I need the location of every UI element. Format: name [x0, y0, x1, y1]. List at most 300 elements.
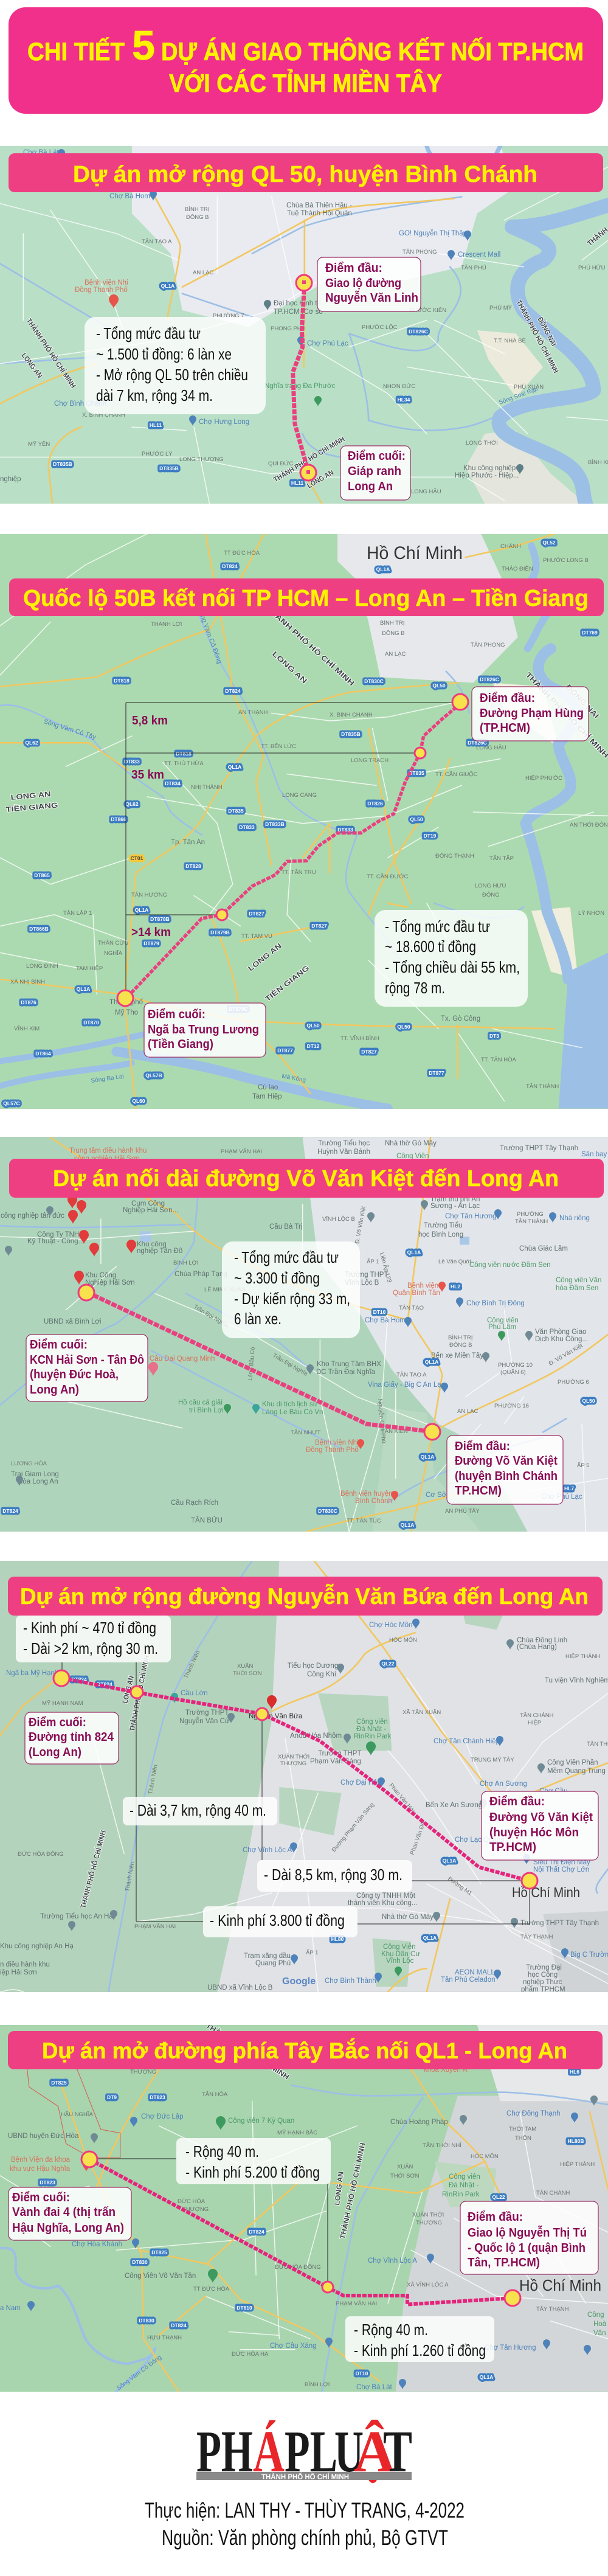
- info box: second section: - Dài 3,7 km, rộng 40 m.: [130, 1801, 266, 1819]
- callout: end: [144, 1003, 266, 1057]
- map labels: PHẠM VĂN HAI: [336, 2300, 377, 2307]
- map labels: nghiệp: [0, 476, 21, 483]
- info box: [222, 1241, 360, 1338]
- road shields: HL11: [150, 422, 162, 428]
- map labels: TÂY THẠNH: [520, 1934, 553, 1940]
- map labels: ĐÔNG B: [449, 1342, 472, 1349]
- road shields: QL1A: [161, 283, 174, 289]
- map labels: THANH LỢI: [151, 621, 182, 628]
- map labels: HẬU NGHĨA: [61, 2111, 93, 2118]
- road shields: QL57B: [145, 1072, 162, 1078]
- map labels: Chùa Bà Thiên Hậu -: [286, 202, 352, 209]
- road shields: DT879C: [229, 1006, 248, 1012]
- map labels: Đường M1: [446, 1875, 473, 1897]
- map labels: Trường Đại: [526, 1964, 562, 1971]
- map pins: [68, 1619, 568, 1983]
- road shields: QL62: [25, 740, 38, 746]
- map labels: ĐỨC HÒA ĐÔNG: [18, 1851, 64, 1858]
- map labels: AN THẠNH: [238, 709, 268, 716]
- map labels: Nhà thờ Gò Mây: [382, 1914, 434, 1921]
- map labels: TT. VĨNH BÌNH: [340, 1035, 379, 1042]
- map labels: Liên Ấp 123: [378, 1252, 393, 1283]
- route: QL 50B: [126, 704, 460, 998]
- map labels: HIỆP THÀNH: [560, 2161, 595, 2168]
- map labels: HIỆP: [528, 1720, 541, 1726]
- road shields: DT826: [367, 800, 383, 807]
- map labels: Tân Phú Celadon: [441, 1976, 496, 1984]
- road shields: DT824: [225, 688, 241, 694]
- route markers: [81, 2151, 520, 2306]
- map labels: Công viên: [449, 2173, 480, 2181]
- map labels: Trường THPT: [345, 1271, 388, 1279]
- map labels: Tiểu học Dương: [288, 1662, 338, 1670]
- callout: start: [472, 687, 589, 741]
- heading: Nguyễn Văn Bứa: [8, 1577, 603, 1616]
- map labels: phẩm TPHCM: [521, 1986, 565, 1993]
- map labels: PHÚ HỮU: [578, 265, 606, 271]
- logo: Pháp Luật: U: [334, 2419, 364, 2484]
- map labels: TT. THỦ THỪA: [164, 760, 204, 767]
- map labels: TÂN LẬP 1: [63, 910, 92, 917]
- road shields: QL22: [492, 2194, 505, 2200]
- heading: Northwest road: Dự án mở đường phía Tây Bắc nối QL1 - Long An: [42, 2038, 567, 2063]
- map labels: CHÁNH: [500, 543, 521, 550]
- map labels: MỸ YÊN: [28, 441, 50, 448]
- map labels: ẤP 1: [367, 1258, 379, 1265]
- road shields: QL1A: [228, 764, 241, 770]
- map labels: a Nam: [0, 2305, 21, 2312]
- map labels: Chợ Bà Lát: [356, 2384, 392, 2391]
- title banner: CHI TIẾT: [27, 37, 125, 66]
- map labels: BÌNH TRỊ: [448, 1335, 472, 1341]
- distance labels: 35 km: [131, 768, 164, 782]
- map labels: PHƯỜNG 10: [498, 1362, 533, 1369]
- map labels: THỚI SƠN: [390, 2173, 420, 2179]
- map labels: THỚI SƠN: [233, 1670, 262, 1677]
- map labels: Đồng Thành Phố: [306, 1446, 359, 1454]
- map labels: Vĩnh Lộc B: [345, 1279, 379, 1286]
- map labels: [5, 543, 608, 1100]
- map labels: TÂN KIÊN: [381, 1428, 408, 1435]
- callout: start: [482, 1791, 598, 1860]
- map labels: Phạm Văn Sáng: [310, 1758, 361, 1765]
- map labels: THÀNH PHỐ HỒ CHÍ MINH: [78, 1829, 108, 1909]
- heading: Võ Văn Kiệt: [9, 1159, 604, 1198]
- map labels: Thành Niên: [147, 1764, 159, 1795]
- map labels: Chợ Tân Chánh Hiệp: [434, 1738, 500, 1745]
- map labels: trí Bình Lợi: [189, 1407, 224, 1414]
- map labels: Đại học Kinh tế: [274, 300, 322, 307]
- map labels: Láng Le Bàu Cò Vn: [262, 1409, 323, 1416]
- map labels: Công Ty TNHH: [37, 1231, 85, 1238]
- map labels: TÂN PHONG: [471, 642, 505, 648]
- map labels: Sân bay: [581, 1151, 607, 1158]
- map labels: Nhà thờ Gò Mây: [385, 1140, 437, 1147]
- map labels: ĐÔNG B: [186, 214, 209, 221]
- info box: ~ 1.500 tỉ đồng: 6 làn xe: [96, 345, 232, 363]
- callout: start: Điểm đầu:: [489, 1795, 545, 1808]
- heading: QL 50B: [9, 578, 604, 616]
- map labels: LONG HẬU: [476, 745, 506, 751]
- map labels: Tp. Tân An: [171, 839, 205, 846]
- map labels: Đ. Võ Văn Kiệt: [548, 1342, 584, 1367]
- map labels: BÌNH LỢI: [173, 1260, 198, 1266]
- map labels: Chợ Hưng Long: [199, 418, 249, 426]
- map labels: LƯƠNG HÒA: [11, 1460, 47, 1467]
- map labels: THƯỢNG: [280, 1760, 306, 1767]
- distance labels: [131, 714, 171, 939]
- map labels: PHƯỜNG 16: [494, 1403, 529, 1409]
- info box: ~ 3.300 tỉ đồng: [234, 1269, 320, 1287]
- heading: QL 50B: Quốc lộ 50B kết nối TP HCM – Long An – Tiền Giang: [23, 586, 589, 611]
- map labels: QUI ĐỨC: [268, 460, 294, 467]
- map labels: Văn: [593, 2330, 606, 2337]
- map labels: Kho Trung Tâm BHX: [317, 1361, 381, 1368]
- callout: start: (huyện Bình Chánh: [455, 1470, 558, 1483]
- info box: cost: - Kinh phí 3.800 tỉ đồng: [210, 1911, 345, 1929]
- road shields: DT877: [277, 1047, 293, 1054]
- start point marker: [296, 275, 312, 291]
- map labels: Trường THPT: [185, 1709, 229, 1717]
- info box: lower: - Rộng 40 m.: [354, 2321, 428, 2339]
- road shields: DT9: [107, 2094, 117, 2100]
- map labels: XUÂN THỚI: [412, 2212, 444, 2218]
- map labels: XÃ TÂN XUÂN: [402, 1709, 441, 1716]
- map labels: Phan Văn Đối: [409, 1820, 427, 1856]
- callout: start: [460, 2201, 598, 2274]
- map labels: Bệnh viện Nhi: [85, 279, 128, 286]
- map labels: Công viên: [487, 1317, 519, 1324]
- map labels: TÂN HÒA: [202, 2091, 228, 2098]
- map labels: TIỀN GIANG: [263, 963, 311, 1003]
- map labels: THƯỢNG: [416, 2220, 442, 2226]
- map labels: ĐỨC HÒA ĐÔNG: [275, 2264, 321, 2271]
- road shields: DT826C: [409, 328, 428, 335]
- road shields: DT833B: [265, 821, 285, 827]
- map labels: Kỹ Thuật - Công...: [27, 1238, 84, 1245]
- map labels: Trần Đại Nghĩa: [271, 1352, 309, 1378]
- road shields: QL57C: [3, 1100, 20, 1106]
- info box: dài 7 km, rộng 34 m.: [96, 386, 213, 404]
- map labels: LÊ MINH XUÂN: [204, 1286, 246, 1293]
- map labels: LONG AN: [333, 2171, 345, 2206]
- map labels: Chợ Phú Lạc: [307, 340, 348, 347]
- callout: start: Đường Võ Văn Kiệt: [455, 1454, 558, 1468]
- map labels: THÂN CỬU: [98, 939, 128, 946]
- callout: end: Đường tỉnh 824: [29, 1731, 114, 1744]
- map labels: ẤP 1: [306, 1949, 318, 1956]
- map labels: Sương - An Lạc: [430, 1203, 480, 1210]
- map labels: Trường THPT Tây Thạnh: [500, 1145, 578, 1152]
- map labels: X. BÌNH CHÁNH: [330, 712, 373, 718]
- map labels: HIỆP THÀNH: [565, 1653, 600, 1660]
- map labels: ĐỒNG NAI: [536, 315, 559, 347]
- end point marker: [300, 465, 316, 481]
- map labels: Mỹ Tho: [115, 1009, 138, 1016]
- route markers: [54, 1670, 537, 1889]
- road shields: DT834: [165, 780, 181, 786]
- map labels: BÌNH TRỊ: [185, 206, 209, 213]
- callout: end: Long An: [348, 480, 393, 493]
- map: Northwest road area: [0, 2021, 608, 2392]
- road shields: DT12: [307, 1043, 320, 1049]
- map labels: (QUẬN 6): [500, 1369, 526, 1376]
- callout: end: [26, 1335, 148, 1401]
- map labels: Công Viên Phần: [547, 1759, 598, 1766]
- road shields: DT828: [185, 863, 201, 869]
- map labels: khoa Xuyên Á: [424, 2066, 468, 2074]
- map labels: Công viên 7 Kỳ Quan: [228, 2117, 294, 2125]
- map labels: Tu viện Vĩnh Nghiêm: [545, 1677, 608, 1684]
- logo: Pháp Luật: [196, 2419, 412, 2484]
- map labels: Trại Giam Long: [11, 1471, 59, 1478]
- map labels: Trường Tiểu: [424, 1222, 462, 1229]
- map labels: TÂN HƯƠNG: [131, 892, 167, 898]
- road shields: DT866: [111, 816, 126, 822]
- map pins: [27, 2059, 598, 2389]
- route markers: [117, 694, 468, 1006]
- callout: end: Điểm cuối:: [12, 2191, 70, 2204]
- map labels: TÂN TẠO: [399, 1305, 424, 1311]
- map labels: TÂN TẠO A: [396, 1372, 427, 1378]
- map labels: [0, 149, 608, 495]
- map labels: Chùa Đông Linh: [517, 1637, 567, 1644]
- map labels: Bệnh viện: [407, 1282, 438, 1290]
- map labels: Nguyễn Văn Cừ: [179, 1717, 230, 1725]
- road shields: QL22: [381, 1661, 395, 1667]
- map pins: [58, 149, 523, 474]
- road shields: DT878B: [150, 916, 170, 922]
- map labels: LONG HỰU: [475, 883, 506, 889]
- map labels: Trần Đại Nghĩa: [192, 1304, 230, 1329]
- map labels: TT. BẾN LỨC: [261, 743, 296, 750]
- heading: Northwest road: [8, 2031, 603, 2069]
- map labels: Nhà riêng: [559, 1215, 590, 1222]
- info box: rộng 78 m.: [385, 979, 445, 997]
- callout: start: Điểm đầu:: [480, 692, 535, 705]
- road shields: QL1A: [376, 566, 390, 572]
- map labels: Khu Công: [85, 1272, 116, 1279]
- road shields: DT833: [239, 824, 255, 830]
- map labels: ĐỒNG NAI: [564, 682, 601, 720]
- map labels: Chợ Bình Chánh: [54, 400, 106, 408]
- map labels: Trường THPT: [318, 1750, 361, 1757]
- map labels: Huỳnh Văn Bánh: [317, 1148, 370, 1156]
- map labels: Câu Đại Quang Minh: [150, 1355, 215, 1363]
- map labels: XUÂN: [397, 2164, 413, 2170]
- callout: start: Điểm đầu:: [455, 1440, 510, 1453]
- info box: ~ 18.600 tỉ đồng: [385, 937, 476, 956]
- map labels: PHƯỜNG 7: [213, 313, 244, 319]
- map labels: Nguyễn Văn Bứa: [249, 1712, 303, 1720]
- road shields: QL1A: [77, 986, 90, 992]
- map labels: Khu Dân Cư: [381, 1951, 420, 1958]
- map labels: RinRin Park: [354, 1733, 392, 1740]
- road shields: QL1A: [407, 1249, 421, 1255]
- callout: end: [9, 2187, 131, 2240]
- road shields: DT769: [582, 630, 598, 636]
- map labels: Công viên Văn: [556, 1277, 601, 1284]
- map labels: PHƯỚC LỘC: [362, 324, 398, 331]
- callout: start: TP.HCM): [455, 1484, 502, 1498]
- road shields: [53, 283, 428, 486]
- map labels: THẢO ĐIỀN: [502, 565, 533, 572]
- info box: second section: [123, 1797, 277, 1825]
- map labels: Cù lao: [258, 1084, 278, 1091]
- map labels: học Công: [528, 1971, 558, 1979]
- map labels: Tam Hiệp: [252, 1093, 282, 1100]
- map labels: Chợ Bà Hom: [365, 1317, 406, 1324]
- road shields: QL50: [582, 1398, 595, 1404]
- map labels: PHƯỜNG: [517, 1211, 544, 1218]
- map labels: PHƯỜNG 6: [558, 1379, 589, 1386]
- map labels: TT. TÂN TÚC: [347, 1518, 381, 1524]
- road shields: DT824: [171, 2322, 187, 2328]
- distance labels: 5,8 km: [132, 714, 168, 727]
- road shields: DT818: [114, 678, 130, 684]
- road shields: DT824: [249, 2229, 264, 2235]
- map labels: TT. TAM VU: [241, 933, 272, 940]
- title banner: [9, 7, 603, 114]
- map labels: ĐÔNG THẠNH: [435, 853, 474, 859]
- logo: Pháp Luật: THÀNH PHỐ HỒ CHÍ MINH: [261, 2472, 349, 2481]
- map labels: Chợ Bà Hom: [109, 193, 150, 200]
- info box: lower: [345, 2316, 494, 2362]
- road shields: QL1A: [480, 2374, 493, 2380]
- map labels: TAM HIỆP: [76, 965, 103, 972]
- route markers: [78, 1285, 440, 1440]
- map labels: ĐỨC HÒA HẠ: [232, 2351, 269, 2358]
- map labels: Khu công nghiệp An Hạ: [0, 1943, 74, 1950]
- map labels: TT ĐỨC HÒA: [193, 2286, 230, 2293]
- map labels: Chợ Tân Hương: [445, 1213, 497, 1220]
- map labels: TT ĐỨC HÒA: [224, 550, 260, 557]
- logo: Pháp Luật: PH: [196, 2419, 253, 2484]
- map labels: Trạm xăng dầu: [244, 1953, 291, 1960]
- callout: end: (Tiền Giang): [148, 1038, 213, 1051]
- map labels: Chợ Bình Thành: [325, 1977, 376, 1985]
- map labels: Sông Vàm Cỏ Đông: [196, 606, 223, 665]
- map pins: [5, 1184, 556, 1501]
- map labels: TP.HCM (Cơ sở: [274, 308, 323, 316]
- map labels: THÀNH PHỐ HỒ CHÍ MINH: [272, 434, 346, 484]
- road shields: DT870: [83, 1019, 99, 1026]
- heading: Nguyễn Văn Bứa: Dự án mở rộng đường Nguyễn Văn Bứa đến Long An: [20, 1584, 589, 1609]
- map labels: Mềm Quang Trung: [547, 1768, 606, 1775]
- road shields: DT823: [40, 2179, 55, 2185]
- info box: - Tổng mức đầu tư: [96, 324, 201, 342]
- info box: first section: - Dài >2 km, rộng 30 m.: [23, 1639, 158, 1658]
- connector lines: [90, 2159, 328, 2288]
- callout: end: Vành đai 4 (thị trấn: [12, 2206, 116, 2219]
- road shields: QL62: [125, 801, 139, 807]
- callout: start: Nguyễn Văn Linh: [325, 290, 418, 305]
- distance labels: >14 km: [131, 926, 171, 939]
- map labels: Đá Nhật -: [449, 2182, 478, 2189]
- map labels: NHỊ THÀNH: [191, 784, 223, 791]
- red location pin: [267, 1695, 277, 1709]
- info box: upper: [176, 2138, 331, 2184]
- road shields: HL80B: [568, 2138, 584, 2144]
- map labels: PHƯỚC KIỂN: [409, 307, 446, 314]
- credits: [145, 2499, 465, 2550]
- road shields: HL7: [564, 1485, 574, 1491]
- map labels: LONG CANG: [282, 792, 317, 799]
- callout: end: [25, 1712, 119, 1764]
- callout: start: - Quốc lộ 1 (quận Bình: [468, 2241, 586, 2255]
- map labels: T.T. NHÀ BÈ: [494, 338, 526, 344]
- map labels: Quận Bình Tân: [393, 1290, 440, 1297]
- road shields: DT818: [176, 751, 192, 757]
- info box: - Tổng mức đầu tư: [234, 1248, 339, 1266]
- map labels: Google: [282, 1976, 316, 1987]
- map labels: Nghiệp Hải Sơn: [85, 1279, 135, 1286]
- map labels: Hiệp Phước - Hiệp...: [455, 472, 519, 479]
- map labels: Chợ Tân Hương: [485, 2344, 536, 2352]
- map labels: PHONG PHÚ: [271, 325, 306, 332]
- road shields: DT826C: [480, 676, 499, 682]
- map labels: TÂN BỬU: [191, 1516, 223, 1524]
- map labels: iệp Hải Sơn: [0, 1969, 37, 1976]
- map labels: TÂN CHÁNH: [536, 2190, 570, 2196]
- road shields: DT865: [34, 872, 50, 878]
- map labels: PHÚ XUÂN: [514, 384, 544, 391]
- route: Nguyễn Văn Bứa: [62, 1678, 530, 1881]
- map labels: THÀNH PHỐ HỒ CHÍ MINH: [337, 2142, 367, 2240]
- road shields: DT10: [373, 1309, 386, 1315]
- map labels: hóa Đầm Sen: [556, 1285, 598, 1292]
- map labels: UBND xã Bình Lợi: [44, 1318, 101, 1325]
- map labels: Thành phố: [109, 999, 143, 1006]
- map labels: Trường Tiểu học: [318, 1140, 370, 1147]
- map labels: HIỆP PHƯỚC: [525, 775, 562, 782]
- callout: start: TP.HCM): [489, 1841, 536, 1854]
- map labels: XÃ VĨNH LỘC A: [407, 2282, 449, 2288]
- map labels: Sông Vàm Cỏ Tây: [43, 718, 97, 741]
- callout: start: Đường Phạm Hùng: [480, 707, 584, 720]
- map labels: AN LẠC: [193, 269, 213, 276]
- map labels: Chợ Đông Thạnh: [506, 2110, 561, 2117]
- map labels: Chùa Giác Lâm: [519, 1245, 568, 1252]
- map labels: PHƯỚC LÝ: [142, 451, 173, 457]
- map labels: NHƠN ĐỨC: [383, 383, 415, 390]
- heading: Võ Văn Kiệt: Dự án nối dài đường Võ Văn Kiệt đến Long An: [53, 1166, 559, 1192]
- map labels: Chùa Hoàng Pháp: [390, 2119, 448, 2126]
- map labels: [1, 1140, 607, 1524]
- map labels: LONG ĐỊNH: [26, 963, 58, 970]
- map labels: ĐỨC HÒA: [178, 2198, 206, 2205]
- map labels: (Chùa Hang): [517, 1644, 557, 1651]
- map labels: Chợ Hóc Môn: [369, 1622, 412, 1629]
- panel: Northwest road: [0, 2021, 608, 2392]
- road shields: DT833: [124, 759, 140, 765]
- road shields: DT877: [429, 1070, 444, 1076]
- road shields: DT19: [424, 833, 437, 839]
- map labels: Vĩnh Lộc: [386, 1957, 414, 1965]
- map labels: TT. TÂN HÒA: [481, 1057, 517, 1063]
- map labels: THỚI TAM: [509, 2126, 536, 2133]
- road shields: HL80: [331, 1936, 344, 1942]
- road shields: DT830: [132, 2259, 148, 2265]
- map labels: TÂN TẠO A: [142, 238, 172, 245]
- map labels: LONG AN: [10, 790, 51, 802]
- map labels: Chợ Đức Lập: [141, 2113, 184, 2120]
- road shields: DT876: [21, 999, 36, 1005]
- map labels: Khu công: [137, 1241, 167, 1248]
- map labels: Chợ Vĩnh Lộc A: [243, 1847, 292, 1854]
- map labels: Công Viên Võ Văn Tần: [125, 2272, 196, 2280]
- callout: end: Hậu Nghĩa, Long An): [12, 2221, 124, 2235]
